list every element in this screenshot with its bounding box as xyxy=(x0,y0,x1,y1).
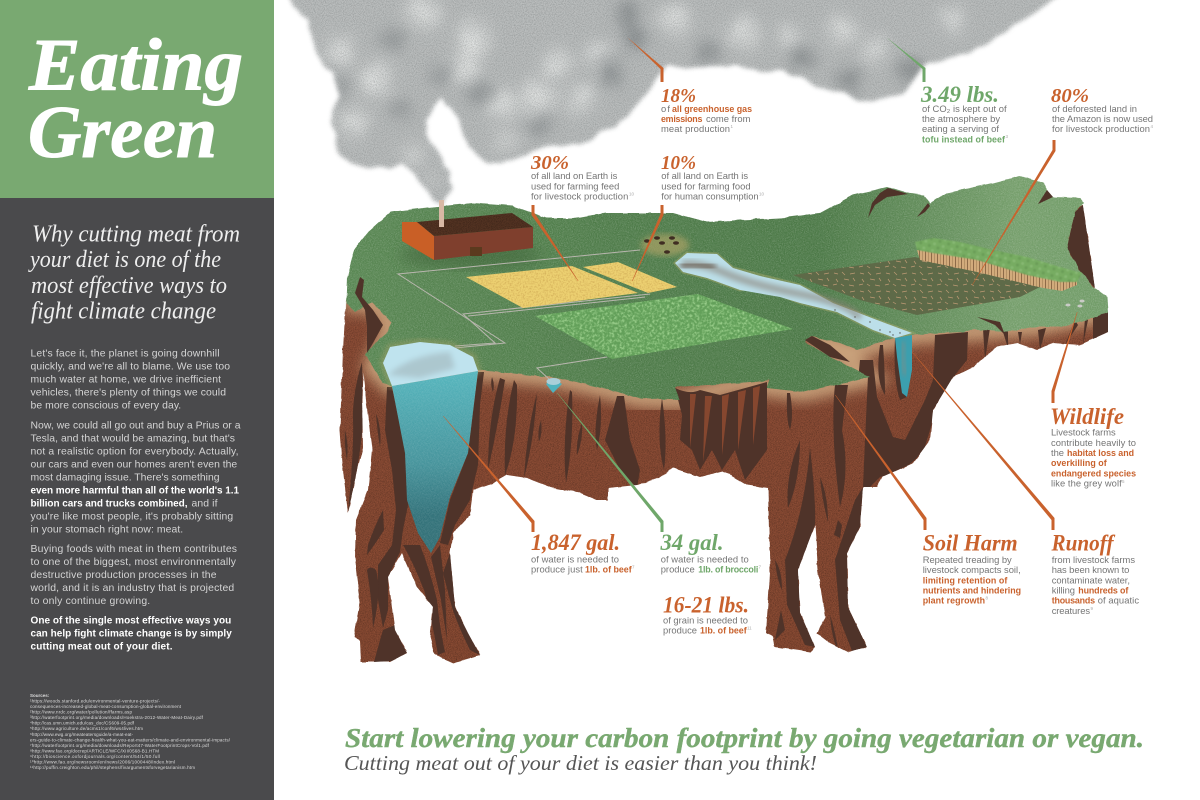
body paragraph 2: Now, we could all go out and buy a Prius or a xyxy=(30,420,241,431)
yellow fields of feed crops xyxy=(466,262,677,308)
callout: 10%: 10 xyxy=(759,192,765,196)
cracks in the land xyxy=(355,188,1053,362)
title: Green xyxy=(28,92,217,174)
leader: 34 gal xyxy=(557,393,664,532)
subtitle: Why cutting meat from xyxy=(32,222,240,248)
callout: 16-21 lbs: 1lb. of beef xyxy=(700,626,747,636)
subtitle xyxy=(28,222,240,324)
callout: 18%: of xyxy=(661,103,670,114)
body paragraph 2: our cars and even our homes aren't even the xyxy=(30,459,237,470)
callout: 34 gal xyxy=(660,530,762,574)
dark streaks: tail and rear legs xyxy=(348,362,363,513)
body paragraph 1: much water at home, we drive inefficient xyxy=(30,375,221,386)
callout: 30%: used for farming feed xyxy=(531,180,619,191)
callout: 3.49 lbs: 3.49 lbs. xyxy=(920,82,999,107)
leader: soil harm xyxy=(835,395,926,530)
body paragraph 2: billion cars and trucks combined, xyxy=(30,498,188,509)
callout: runoff: hundreds of xyxy=(1078,586,1128,596)
body paragraph 2 xyxy=(30,420,241,535)
callout: 1,847 gal: produce just xyxy=(531,564,583,574)
sources xyxy=(30,693,231,770)
callout: runoff: of aquatic xyxy=(1098,595,1139,606)
callout: runoff: thousands xyxy=(1052,596,1095,606)
leader: wildlife xyxy=(1052,312,1078,403)
sources: consequences-increased-global-meat-consumption-global-environment xyxy=(30,704,182,709)
callout: wildlife xyxy=(1050,404,1136,489)
sources: ⁷http://waterfootprint.org/media/downloads/Report47-WaterFootprintCrops-Vol1.pdf xyxy=(30,743,210,748)
sources: ⁶http://www.ewg.org/meateatersguide/a-meat-eat- xyxy=(30,732,134,737)
small pond xyxy=(546,378,562,393)
cattle herd xyxy=(641,234,689,256)
waterfall xyxy=(895,335,912,397)
footer call to action xyxy=(344,723,1144,775)
callout: wildlife: like the grey wolf xyxy=(1051,478,1122,489)
callout: runoff: creatures xyxy=(1052,605,1090,616)
leader: 3.49 lbs xyxy=(886,37,926,82)
callout: soil harm: Repeated treading by xyxy=(923,554,1012,565)
barn xyxy=(402,200,533,260)
callout: 80%: of deforested land in xyxy=(1052,103,1137,114)
body paragraph 3: Buying foods with meat in them contributes xyxy=(30,544,237,555)
callout: 3.49 lbs: eating a serving of xyxy=(922,123,999,134)
callout: 3.49 lbs: the atmosphere by xyxy=(922,113,1000,124)
sources: ¹⁰http://www.fao.org/newsroom/en/news/2006/1000448/index.html xyxy=(30,760,175,765)
callout: 1,847 gal xyxy=(531,530,635,574)
body paragraph 1: Let's face it, the planet is going downhill xyxy=(30,349,220,360)
callout: wildlife: overkilling of xyxy=(1051,458,1107,468)
sources: Sources: xyxy=(30,693,50,698)
body paragraph 1: vehicles, there's plenty of things we could xyxy=(30,388,226,399)
callout: 80%: 4 xyxy=(1150,124,1154,129)
callout: wildlife: contribute heavily to xyxy=(1051,437,1136,448)
body paragraph 3 xyxy=(30,544,237,607)
body paragraph 2: in your stomach right now: meat. xyxy=(30,524,183,535)
callout: 3.49 lbs: tofu instead of beef xyxy=(922,134,1005,144)
body paragraph 4: One of the single most effective ways you xyxy=(30,615,231,626)
green field of crops xyxy=(535,294,793,359)
pipes xyxy=(398,250,650,380)
callout: 34 gal: of water is needed to xyxy=(661,553,749,564)
callout: 1,847 gal: 7 xyxy=(632,564,635,570)
body paragraph 1: quickly, and we're all to blame. We use too xyxy=(30,362,230,373)
callout: 10%: used for farming food xyxy=(661,180,751,191)
smoke cloud xyxy=(285,0,1075,206)
callout: 18%: come from xyxy=(706,113,751,124)
sources: ³http://waterfootprint.org/media/downloads/Hoekstra-2012-Water-Meat-Dairy.pdf xyxy=(30,715,204,720)
logged forest stumps xyxy=(793,257,1040,315)
body paragraph 1: be more conscious of every day. xyxy=(30,400,181,412)
callout: soil harm: plant regrowth xyxy=(923,596,985,606)
callout: 18%: emissions xyxy=(661,114,702,124)
leader: 30% xyxy=(532,205,578,281)
callout: 30% xyxy=(530,152,635,202)
callout: 80% xyxy=(1051,85,1154,134)
sidebar title panel xyxy=(0,0,274,198)
body paragraph 1 xyxy=(30,349,230,412)
callout: 18%: meat production xyxy=(661,123,730,134)
callout: 10%: for human consumption xyxy=(661,190,759,202)
callout: 34 gal: 1lb. of broccoli xyxy=(698,564,758,574)
body paragraph 3: destructive production processes in the xyxy=(30,570,217,581)
callout: 1,847 gal: 1,847 gal. xyxy=(531,530,620,555)
callout: runoff: has been known to xyxy=(1052,564,1129,575)
body paragraph 2: most damaging issue. There's something xyxy=(30,472,220,483)
callout: 3.49 lbs xyxy=(920,82,1008,144)
callout: runoff: Runoff xyxy=(1051,531,1116,556)
grey wolves xyxy=(1065,300,1085,308)
sidebar text panel xyxy=(0,198,274,800)
body paragraph 3: to only continue growing. xyxy=(30,596,150,607)
callout: soil harm: limiting retention of xyxy=(923,575,1007,585)
callout: wildlife: 5 xyxy=(1122,479,1125,484)
lake xyxy=(383,342,478,553)
sources: ⁸http://www.fao.org/docrep/ARTICLE/WFC/XII/0568-B1.HTM xyxy=(30,748,159,753)
sources: ²http://www.nrdc.org/water/pollution/ffarms.asp xyxy=(30,710,132,715)
callout: soil harm: livestock compacts soil, xyxy=(923,564,1021,575)
callout: 80%: the Amazon is now used xyxy=(1052,113,1153,124)
body paragraph 4: can help fight climate change is by simply xyxy=(30,628,232,639)
sources: ⁴http://cas.umn.umich.edu/cas_doc/CS609-05.pdf xyxy=(30,721,135,726)
title xyxy=(28,24,243,174)
callout: 34 gal: 7 xyxy=(758,564,762,570)
leader: 80% xyxy=(972,140,1056,285)
callout: 1,847 gal: of water is needed to xyxy=(531,553,619,564)
callout: 30%: 10 xyxy=(629,192,635,196)
left sidebar xyxy=(0,0,274,800)
callout: 3.49 lbs: of CO₂ is kept out of xyxy=(922,103,1007,114)
callout: 1,847 gal: 1lb. of beef xyxy=(585,564,632,574)
leader: 18% xyxy=(627,37,664,82)
callout: 3.49 lbs: 3 xyxy=(1006,134,1008,139)
callout: 10%: of all land on Earth is xyxy=(661,170,748,181)
callout: 16-21 lbs xyxy=(663,593,752,636)
shadow under barn xyxy=(400,241,540,269)
sources: ¹¹http://puffin.creighton.edu/phil/stephens/fivargumentsforvegetarianism.htm xyxy=(30,765,195,770)
body paragraph 4 xyxy=(30,615,232,652)
callout: 10%: 10% xyxy=(661,152,696,174)
callout: wildlife: Livestock farms xyxy=(1051,426,1116,438)
remaining forest xyxy=(915,238,1082,291)
leader lines xyxy=(443,37,1078,532)
callout: runoff xyxy=(1051,531,1139,616)
callout: wildlife: habitat loss and xyxy=(1067,448,1134,458)
callout: 80%: 80% xyxy=(1051,85,1089,107)
grass top xyxy=(346,176,1108,400)
subtitle: most effective ways to xyxy=(31,273,227,299)
body paragraph 3: to one of the biggest, most environmentally xyxy=(30,557,237,568)
body paragraph 4: cutting meat out of your diet. xyxy=(30,641,173,652)
leader: 1,847 gal xyxy=(443,416,534,532)
callout: soil harm: Soil Harm xyxy=(923,531,1018,556)
body paragraph 2: and if xyxy=(192,498,218,509)
callout: 16-21 lbs: 11 xyxy=(747,626,752,631)
callout: 16-21 lbs: produce xyxy=(663,625,697,636)
sources: ⁹http://bioscience.oxfordjournals.org/content/54/1/50.full xyxy=(30,754,160,759)
sources: ¹https://woods.stanford.edu/environmental-venture-projects/- xyxy=(30,698,160,703)
callout: 16-21 lbs: 16-21 lbs. xyxy=(663,593,749,618)
callout: 16-21 lbs: of grain is needed to xyxy=(663,614,748,625)
contaminated river xyxy=(675,253,912,338)
sources: ⁵http://www.agriculture.de/acms1/conf6/ws4lives.htm xyxy=(30,726,143,731)
callout: runoff: from livestock farms xyxy=(1052,554,1135,565)
callout: 18%: 1 xyxy=(730,124,734,129)
title: Eating xyxy=(28,24,243,106)
callout: 30%: of all land on Earth is xyxy=(531,170,618,181)
callout: runoff: killing xyxy=(1052,584,1075,596)
callout: 10% xyxy=(661,152,765,202)
sources: ers-guide-to-climate-change-health-what-you-eat-matters/climate-and-environmental-impacts/ xyxy=(30,737,231,742)
body paragraph 2: Tesla, and that would be amazing, but that's xyxy=(30,433,235,444)
body paragraph 2: you're like most people, it's probably sitting xyxy=(30,511,233,522)
callout: 34 gal: 34 gal. xyxy=(660,530,724,555)
callout: runoff: 9 xyxy=(1090,606,1094,611)
leader: runoff xyxy=(912,352,1054,530)
callout: soil harm xyxy=(923,531,1021,606)
leader: 10% xyxy=(632,205,664,281)
callout: 80%: for livestock production xyxy=(1052,123,1150,134)
callout: wildlife: endangered species xyxy=(1051,468,1136,478)
footer call to action: Cutting meat out of your diet is easier than you think! xyxy=(344,751,817,775)
callout: 30%: 30% xyxy=(530,152,569,174)
body paragraph 2: even more harmful than all of the world's 1.1 xyxy=(30,485,239,496)
callout: soil harm: nutrients and hindering xyxy=(923,586,1021,596)
callout: wildlife: Wildlife xyxy=(1050,404,1124,429)
callout: 18%: 18% xyxy=(661,85,696,107)
footer call to action: Start lowering your carbon footprint by going vegetarian or vegan. xyxy=(345,723,1144,753)
rock body xyxy=(340,200,1108,663)
callout: runoff: contaminate water, xyxy=(1052,574,1130,585)
callout: wildlife: the xyxy=(1051,447,1064,458)
callout: 18% xyxy=(661,85,752,134)
body paragraph 2: not a realistic option for everybody. Actually, xyxy=(30,446,238,457)
callout: soil harm: 8 xyxy=(986,596,988,600)
subtitle: your diet is one of the xyxy=(28,247,221,273)
subtitle: fight climate change xyxy=(31,298,216,324)
callout: 18%: all greenhouse gas xyxy=(672,104,752,114)
cow-shaped land mass xyxy=(340,176,1108,663)
body paragraph 3: world, and it is an industry that is projected xyxy=(30,583,234,594)
callout: 34 gal: produce xyxy=(661,564,695,574)
callout: 30%: for livestock production xyxy=(531,190,628,202)
